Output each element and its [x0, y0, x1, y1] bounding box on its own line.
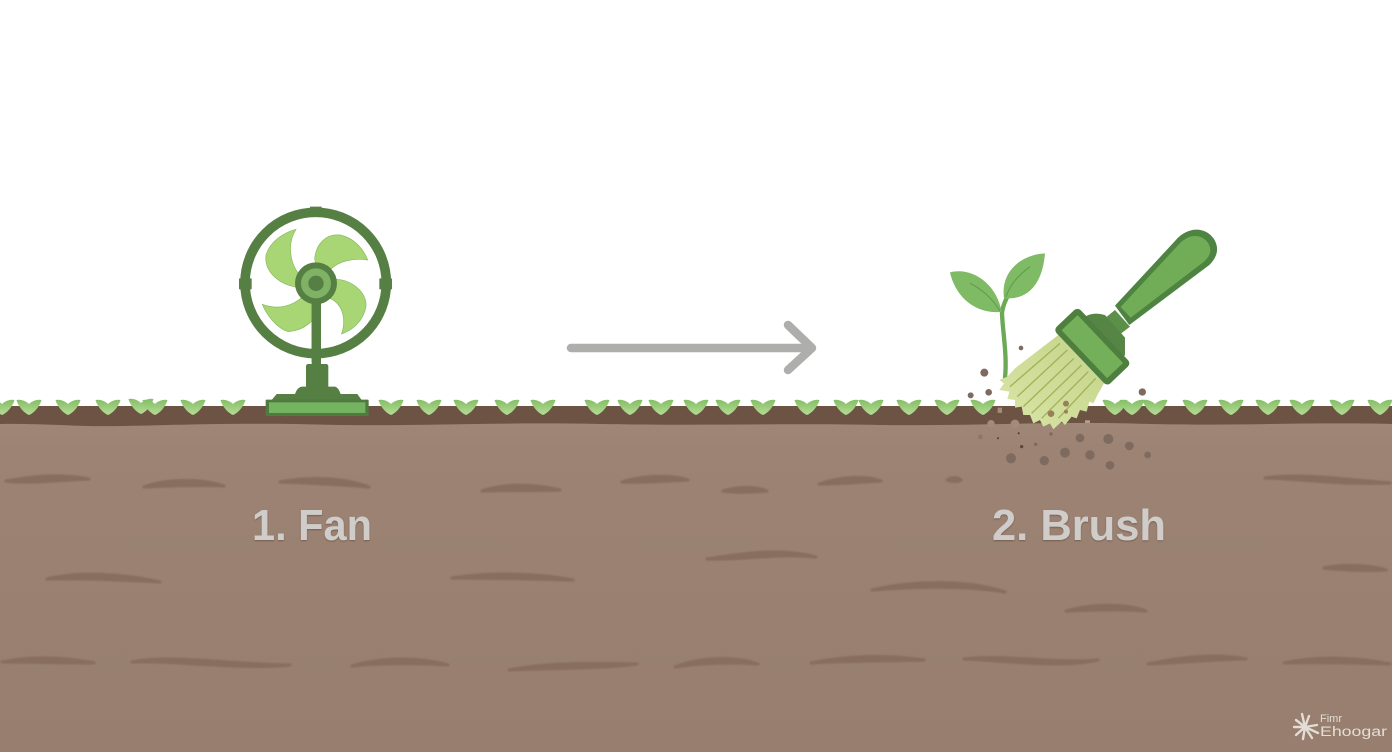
- soil ground: [0, 406, 1392, 752]
- neck: [1104, 310, 1130, 334]
- cage tabs: [239, 207, 392, 289]
- brush head: [1053, 307, 1131, 386]
- bristles: [999, 335, 1104, 429]
- icon: seedling: [950, 253, 1045, 378]
- soil streaks: [2, 476, 1390, 670]
- soil particles: [968, 346, 1151, 470]
- label: 2. Brush: 2. Brush: [992, 501, 1166, 550]
- background sky: [0, 0, 1392, 408]
- label: 1. Fan: 1. Fan: [252, 501, 372, 550]
- watermark flower icon: [1294, 714, 1318, 739]
- icon: brush: [999, 230, 1217, 429]
- stem: [1002, 297, 1007, 378]
- fan blades: [262, 229, 368, 334]
- soil body: [0, 415, 1392, 752]
- row of seedlings: [0, 399, 1392, 415]
- watermark text: Fimr: [1320, 713, 1342, 725]
- arrow: [571, 325, 812, 370]
- fan stand: [272, 303, 362, 400]
- bristle lines: [1010, 343, 1096, 418]
- leaf veins: [970, 267, 1030, 311]
- fan base plate: [266, 400, 369, 416]
- icon: fan: [239, 207, 392, 416]
- fan cage ring: [245, 212, 386, 354]
- watermark text: Ehoogar: [1320, 724, 1388, 739]
- left leaf: [950, 271, 1002, 312]
- watermark text: [1320, 713, 1388, 739]
- stand over ring: [312, 303, 321, 362]
- handle: [1115, 230, 1217, 325]
- dark topsoil band: [0, 406, 1392, 426]
- ferrule: [1083, 314, 1125, 372]
- fan hub: [295, 262, 337, 304]
- watermark logo: [1294, 713, 1388, 739]
- right leaf: [1004, 253, 1045, 298]
